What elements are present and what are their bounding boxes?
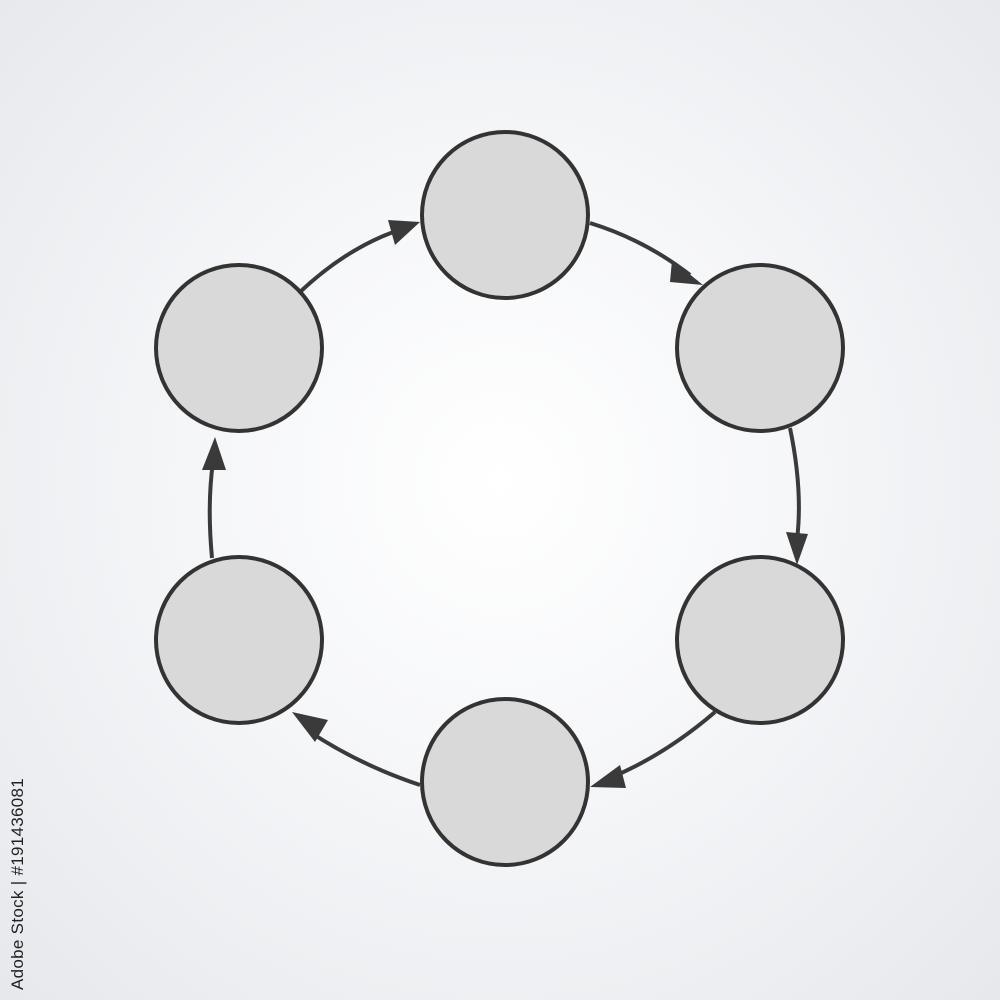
credit text: Adobe Stock | #191436081 — [8, 778, 27, 990]
circle: top — [422, 132, 588, 298]
circle: right-bottom — [677, 557, 843, 723]
arrow: left-bottom to left-top — [202, 437, 226, 558]
arrow: bottom to left-bottom — [292, 712, 420, 785]
circle: left-top — [156, 265, 322, 431]
arrow: right-bottom to bottom — [590, 712, 715, 788]
arrow: right-top to right-bottom — [786, 428, 808, 565]
circle: left-bottom — [156, 557, 322, 723]
circle: right-top — [677, 265, 843, 431]
circle: bottom — [422, 699, 588, 865]
arrow: top to right-top — [590, 223, 703, 285]
arrow: left-top to top — [300, 220, 420, 292]
